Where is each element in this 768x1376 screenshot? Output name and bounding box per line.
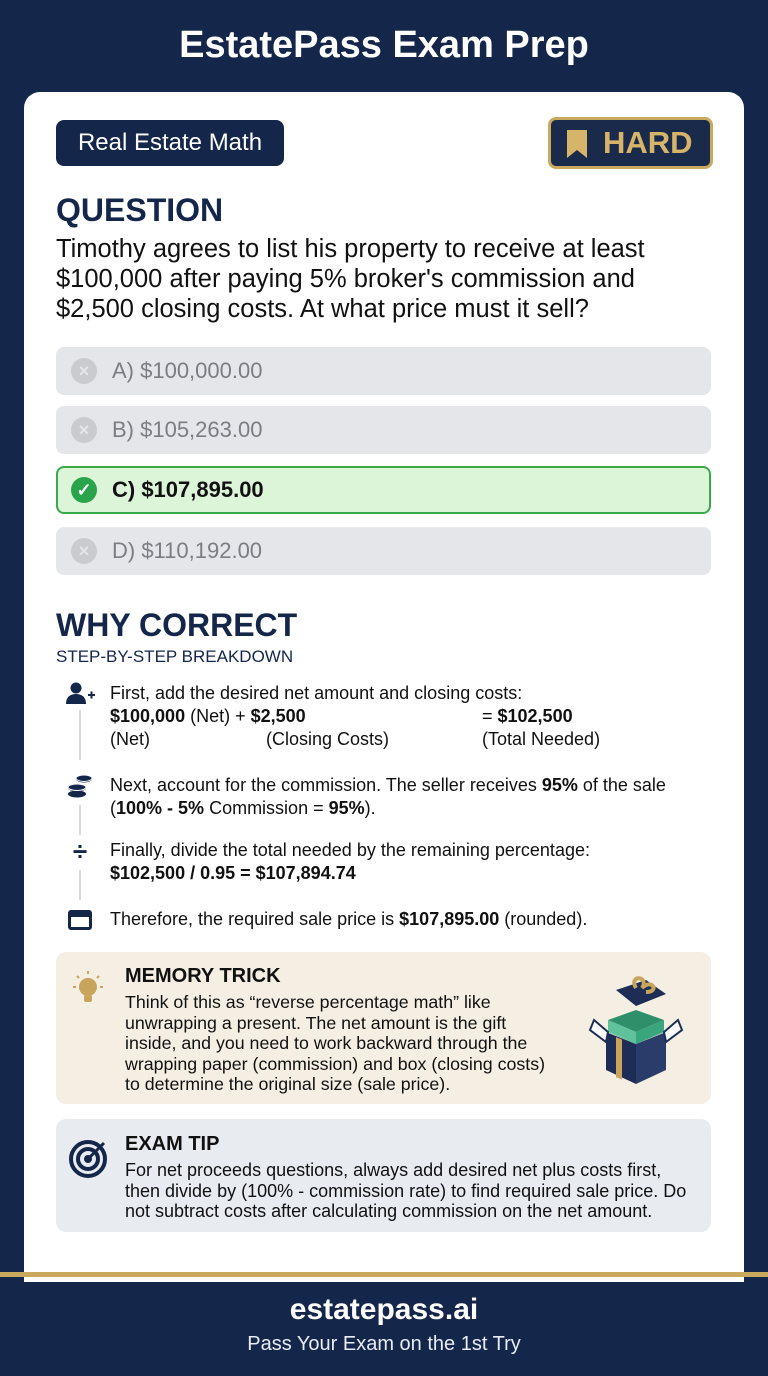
option B: × bbox=[79, 420, 89, 440]
text: For net proceeds questions, always add desired net plus costs first, then divide by (100% - commission rate) to find required sale price. Do not subtract costs after calculating commission on the net amount. bbox=[125, 1160, 686, 1221]
tag: category: Real Estate Math bbox=[78, 129, 262, 156]
option D: × bbox=[79, 541, 89, 561]
option D: D) $110,192.00 bbox=[112, 538, 262, 563]
heading: why correct: WHY CORRECT bbox=[56, 607, 297, 643]
footer: site: estatepass.ai bbox=[290, 1293, 478, 1326]
step 1: (Closing Costs) bbox=[266, 729, 389, 749]
step 1: (Total Needed) bbox=[482, 729, 600, 749]
option B bbox=[56, 406, 711, 454]
icon: card bbox=[68, 910, 92, 930]
step 1 bbox=[110, 683, 600, 749]
step 1: = $102,500 bbox=[482, 706, 573, 726]
option C correct: C) $107,895.00 bbox=[112, 477, 264, 502]
option B: B) $105,263.00 bbox=[112, 417, 262, 442]
step 1: $100,000 (Net) + $2,500 bbox=[110, 706, 306, 726]
badge: difficulty bbox=[548, 117, 713, 169]
panel: exam tip bbox=[56, 1119, 711, 1232]
step 4: Therefore, the required sale price is $107,895.00 (rounded). bbox=[110, 909, 587, 929]
icon: gift box bbox=[588, 976, 684, 1084]
step 3: $102,500 / 0.95 = $107,894.74 bbox=[110, 863, 356, 883]
title: EstatePass Exam Prep bbox=[179, 24, 589, 66]
icon: coins bbox=[68, 776, 92, 798]
badge: difficulty: HARD bbox=[603, 125, 693, 160]
tag: category bbox=[56, 120, 284, 166]
panel: memory trick bbox=[56, 952, 711, 1104]
footer gold line bbox=[0, 1272, 768, 1277]
step 2: Next, account for the commission. The seller receives 95% of the sale (100% - 5% Commission = 95%). bbox=[110, 775, 666, 818]
icon: bookmark bbox=[567, 130, 587, 158]
icon: person plus bbox=[66, 682, 95, 704]
heading: EXAM TIP bbox=[125, 1133, 219, 1155]
icon: target bbox=[69, 1140, 107, 1178]
option A: × bbox=[79, 361, 89, 381]
question text: Timothy agrees to list his property to receive at least $100,000 after paying 5% broker's commission and $2,500 closing costs. At what price must it sell? bbox=[56, 235, 645, 323]
text: Think of this as “reverse percentage math” like unwrapping a present. The net amount is the gift inside, and you need to work backward through the wrapping paper (commission) and box (closing costs) to determine the original size (sale price). bbox=[125, 992, 545, 1094]
step 3 bbox=[110, 840, 590, 883]
subheading: STEP-BY-STEP BREAKDOWN bbox=[56, 647, 293, 666]
footer: tagline: Pass Your Exam on the 1st Try bbox=[247, 1333, 521, 1355]
option C correct: ✓ bbox=[76, 480, 92, 500]
option C correct bbox=[56, 466, 711, 514]
heading: question: QUESTION bbox=[56, 192, 223, 228]
icon: lightbulb bbox=[73, 971, 103, 1002]
option D bbox=[56, 527, 711, 575]
option A bbox=[56, 347, 711, 395]
step 1: (Net) bbox=[110, 729, 150, 749]
option A: A) $100,000.00 bbox=[112, 358, 262, 383]
heading: MEMORY TRICK bbox=[125, 965, 281, 987]
step 1: First, add the desired net amount and closing costs: bbox=[110, 683, 522, 703]
icon: divide: ÷ bbox=[73, 836, 87, 866]
step 3: Finally, divide the total needed by the remaining percentage: bbox=[110, 840, 590, 860]
